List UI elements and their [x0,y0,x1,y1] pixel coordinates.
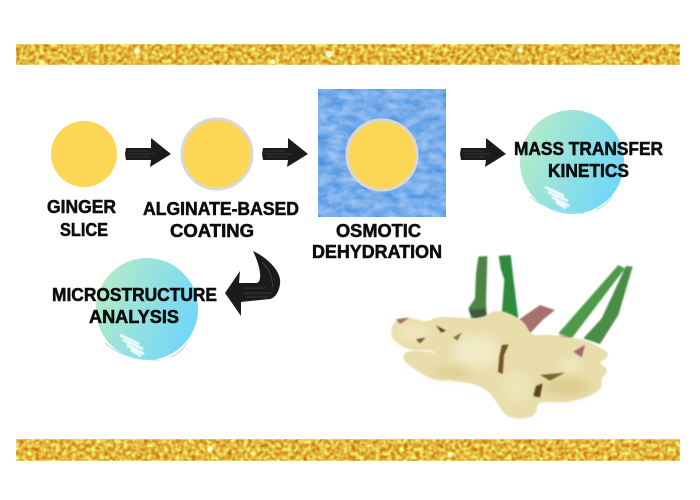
label: mass transfer kinetics [514,139,663,181]
top glitter band [16,44,680,66]
icon: brush circle microstructure [96,258,198,360]
label: alginate-based coating: COATING [170,221,254,241]
icon: ginger slice circle [51,121,117,187]
arrow: curved, back to microstructure [225,251,280,316]
label: ginger slice: GINGER [47,197,116,217]
panel: osmotic dehydration solution [318,89,446,217]
label: microstructure analysis [52,285,217,327]
rhizome shading [397,326,590,403]
icon: coated slice circle [182,119,252,189]
arrow: dehydration to mass transfer [460,138,506,167]
icon: coated slice in solution [347,120,417,190]
label: mass transfer kinetics: KINETICS [548,161,629,181]
label: microstructure analysis: ANALYSIS [89,307,179,327]
label: alginate-based coating: ALGINATE-BASED [143,199,299,219]
arrow: coating to osmotic dehydration [262,138,308,167]
bottom glitter band [16,439,680,461]
label: ginger slice: SLICE [60,220,108,240]
label: alginate-based coating [143,199,299,241]
brown scars [396,318,585,397]
label: osmotic dehydration: DEHYDRATION [312,242,442,262]
rhizome body [392,312,607,418]
arrow: slice to coating [125,138,171,167]
stems [468,255,633,370]
label: microstructure analysis: MICROSTRUCTURE [52,285,217,305]
icon: brush circle mass transfer [520,110,624,214]
image: ginger rhizome [392,255,633,418]
label: osmotic dehydration [312,221,442,262]
label: osmotic dehydration: OSMOTIC [336,221,421,241]
label: ginger slice [47,197,116,240]
label: mass transfer kinetics: MASS TRANSFER [514,139,663,159]
